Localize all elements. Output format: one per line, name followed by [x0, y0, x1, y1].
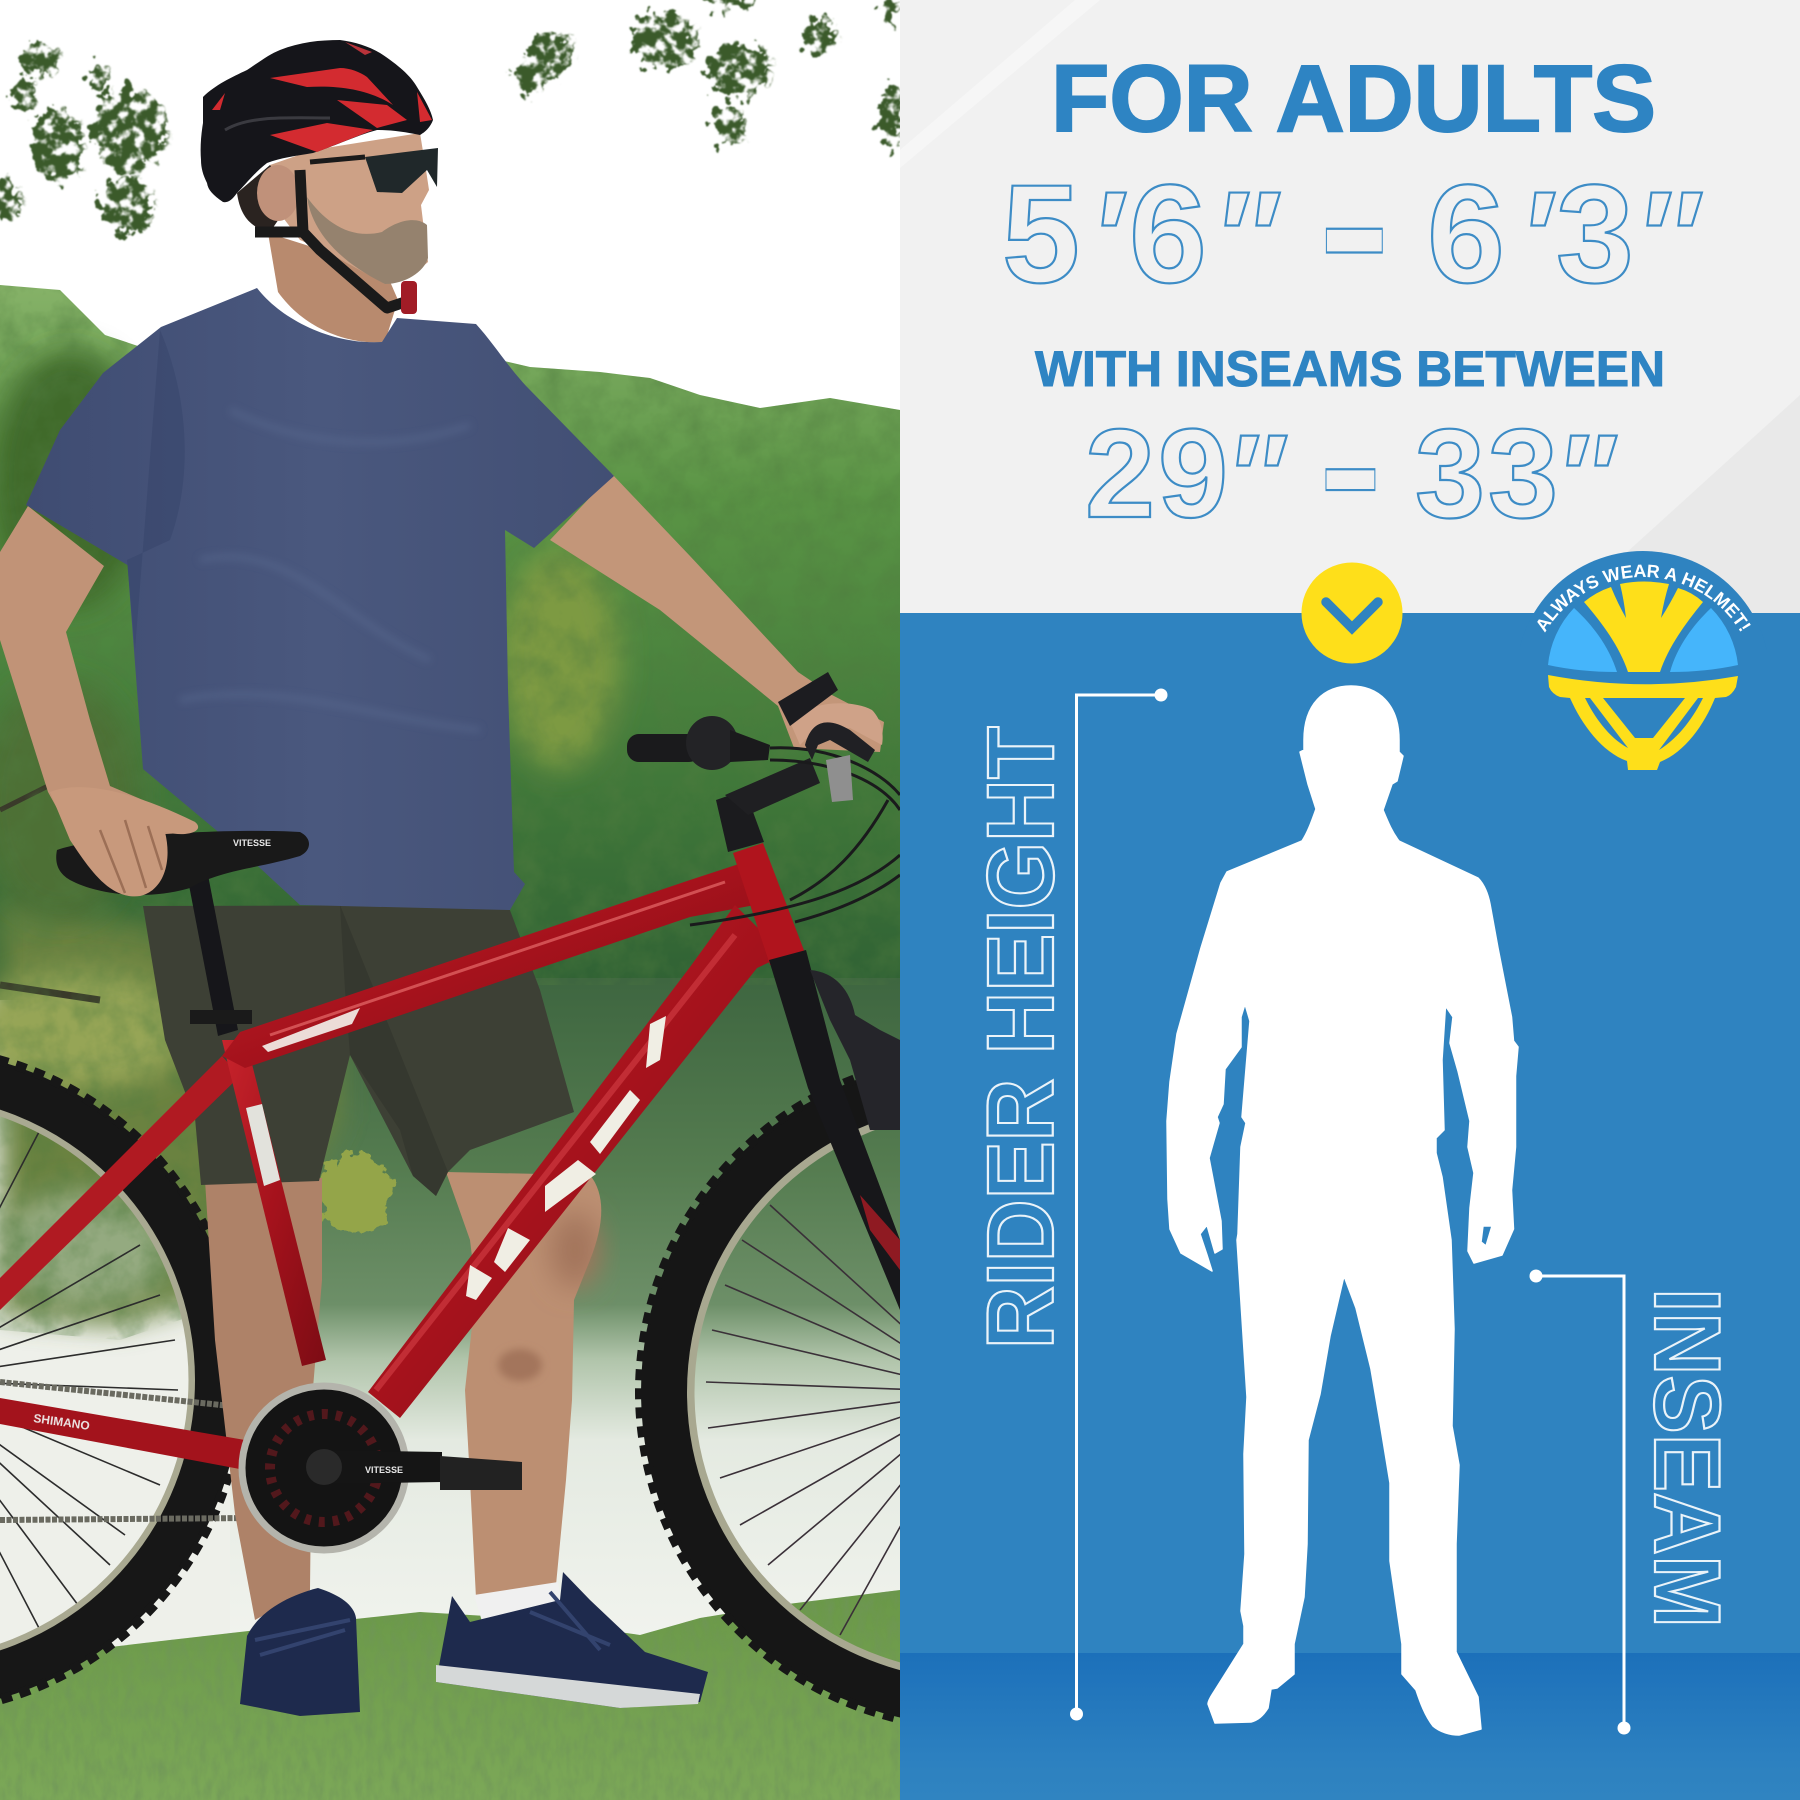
drivetrain: VITESSE — [365, 1465, 403, 1475]
stem and handlebar — [627, 716, 900, 925]
arm on seat — [0, 506, 195, 834]
head tube — [733, 843, 805, 965]
helmet shell sides — [1548, 608, 1738, 672]
inseam label: INSEAM — [1635, 1288, 1740, 1628]
shoes — [240, 1572, 708, 1716]
hand on saddle — [50, 787, 198, 896]
down tube decal — [466, 1016, 666, 1300]
rider height range: – — [1323, 87, 1386, 356]
seat post — [188, 875, 238, 1036]
seat stay — [0, 1056, 240, 1310]
pale water below foliage — [0, 1300, 240, 1660]
helmet rim and straps — [1548, 675, 1738, 770]
tree-covered hill — [0, 285, 900, 1000]
arm on handlebar — [550, 474, 884, 752]
neck — [268, 233, 398, 342]
rider height range: 5663 — [1002, 155, 1634, 312]
inseam range: ″″ — [1226, 411, 1617, 543]
frame sticker — [246, 1104, 280, 1186]
icon: yellow chevron circle — [1302, 562, 1402, 664]
rider height range — [1002, 87, 1702, 356]
bike frame — [0, 843, 805, 1470]
rear wheel — [0, 1048, 250, 1712]
inseam bracket — [1530, 1270, 1630, 1734]
front wheel — [640, 1057, 1310, 1727]
chain stay label: SHIMANO — [33, 1411, 91, 1433]
saddle: VITESSE — [233, 838, 271, 848]
sunglasses — [310, 148, 438, 193]
subheading: with inseams between: WITH INSEAMS BETWEEN — [1035, 341, 1665, 397]
floor band — [900, 1653, 1800, 1800]
badge: always wear a helmet — [1534, 551, 1752, 770]
cycling helmet — [201, 40, 433, 202]
watch — [778, 672, 838, 726]
helmet shell centre — [1584, 582, 1703, 672]
down tube — [368, 905, 785, 1418]
inseam range: – — [1323, 345, 1378, 581]
panel: blue bottom area — [900, 613, 1800, 1800]
strap red tip — [401, 281, 417, 314]
saddle — [56, 831, 309, 895]
rider height bracket — [1070, 688, 1168, 1720]
rider height label: RIDER HEIGHT — [968, 726, 1074, 1349]
chain — [0, 1382, 250, 1520]
front fork and brake — [769, 950, 900, 1310]
photo: cyclist with red bike by a lake — [0, 0, 900, 1800]
socks — [476, 1582, 556, 1620]
overhanging leaves — [0, 0, 902, 235]
hand on handlebar — [790, 703, 883, 745]
sky — [0, 0, 900, 1800]
seat clamp — [190, 1010, 252, 1024]
helmet strap — [255, 170, 405, 308]
chain stay — [0, 1398, 245, 1470]
left foliage — [0, 350, 620, 1325]
head and face — [237, 133, 429, 284]
brake lever — [805, 722, 875, 762]
top tube — [222, 862, 755, 1068]
top tube decal — [262, 1008, 360, 1052]
drivetrain — [242, 1386, 522, 1550]
t-shirt — [26, 288, 614, 910]
heading: for adults: FOR ADULTS — [1051, 46, 1656, 152]
foliage mottling — [0, 280, 900, 1340]
seat tube — [222, 1040, 326, 1366]
rider height range: ″″ — [1213, 164, 1702, 310]
inseam range: 2933 — [1085, 403, 1558, 544]
human silhouette — [1167, 686, 1518, 1735]
inseam range — [1085, 345, 1617, 581]
front leg — [446, 1172, 601, 1598]
shorts — [143, 905, 574, 1196]
rider height range: ′′ — [1090, 164, 1555, 310]
lake water — [230, 978, 900, 1658]
back leg — [205, 1178, 322, 1620]
panel: light top area — [900, 0, 1800, 613]
badge text: ALWAYS WEAR A HELMET! — [1537, 564, 1751, 632]
grass — [0, 1580, 900, 1800]
